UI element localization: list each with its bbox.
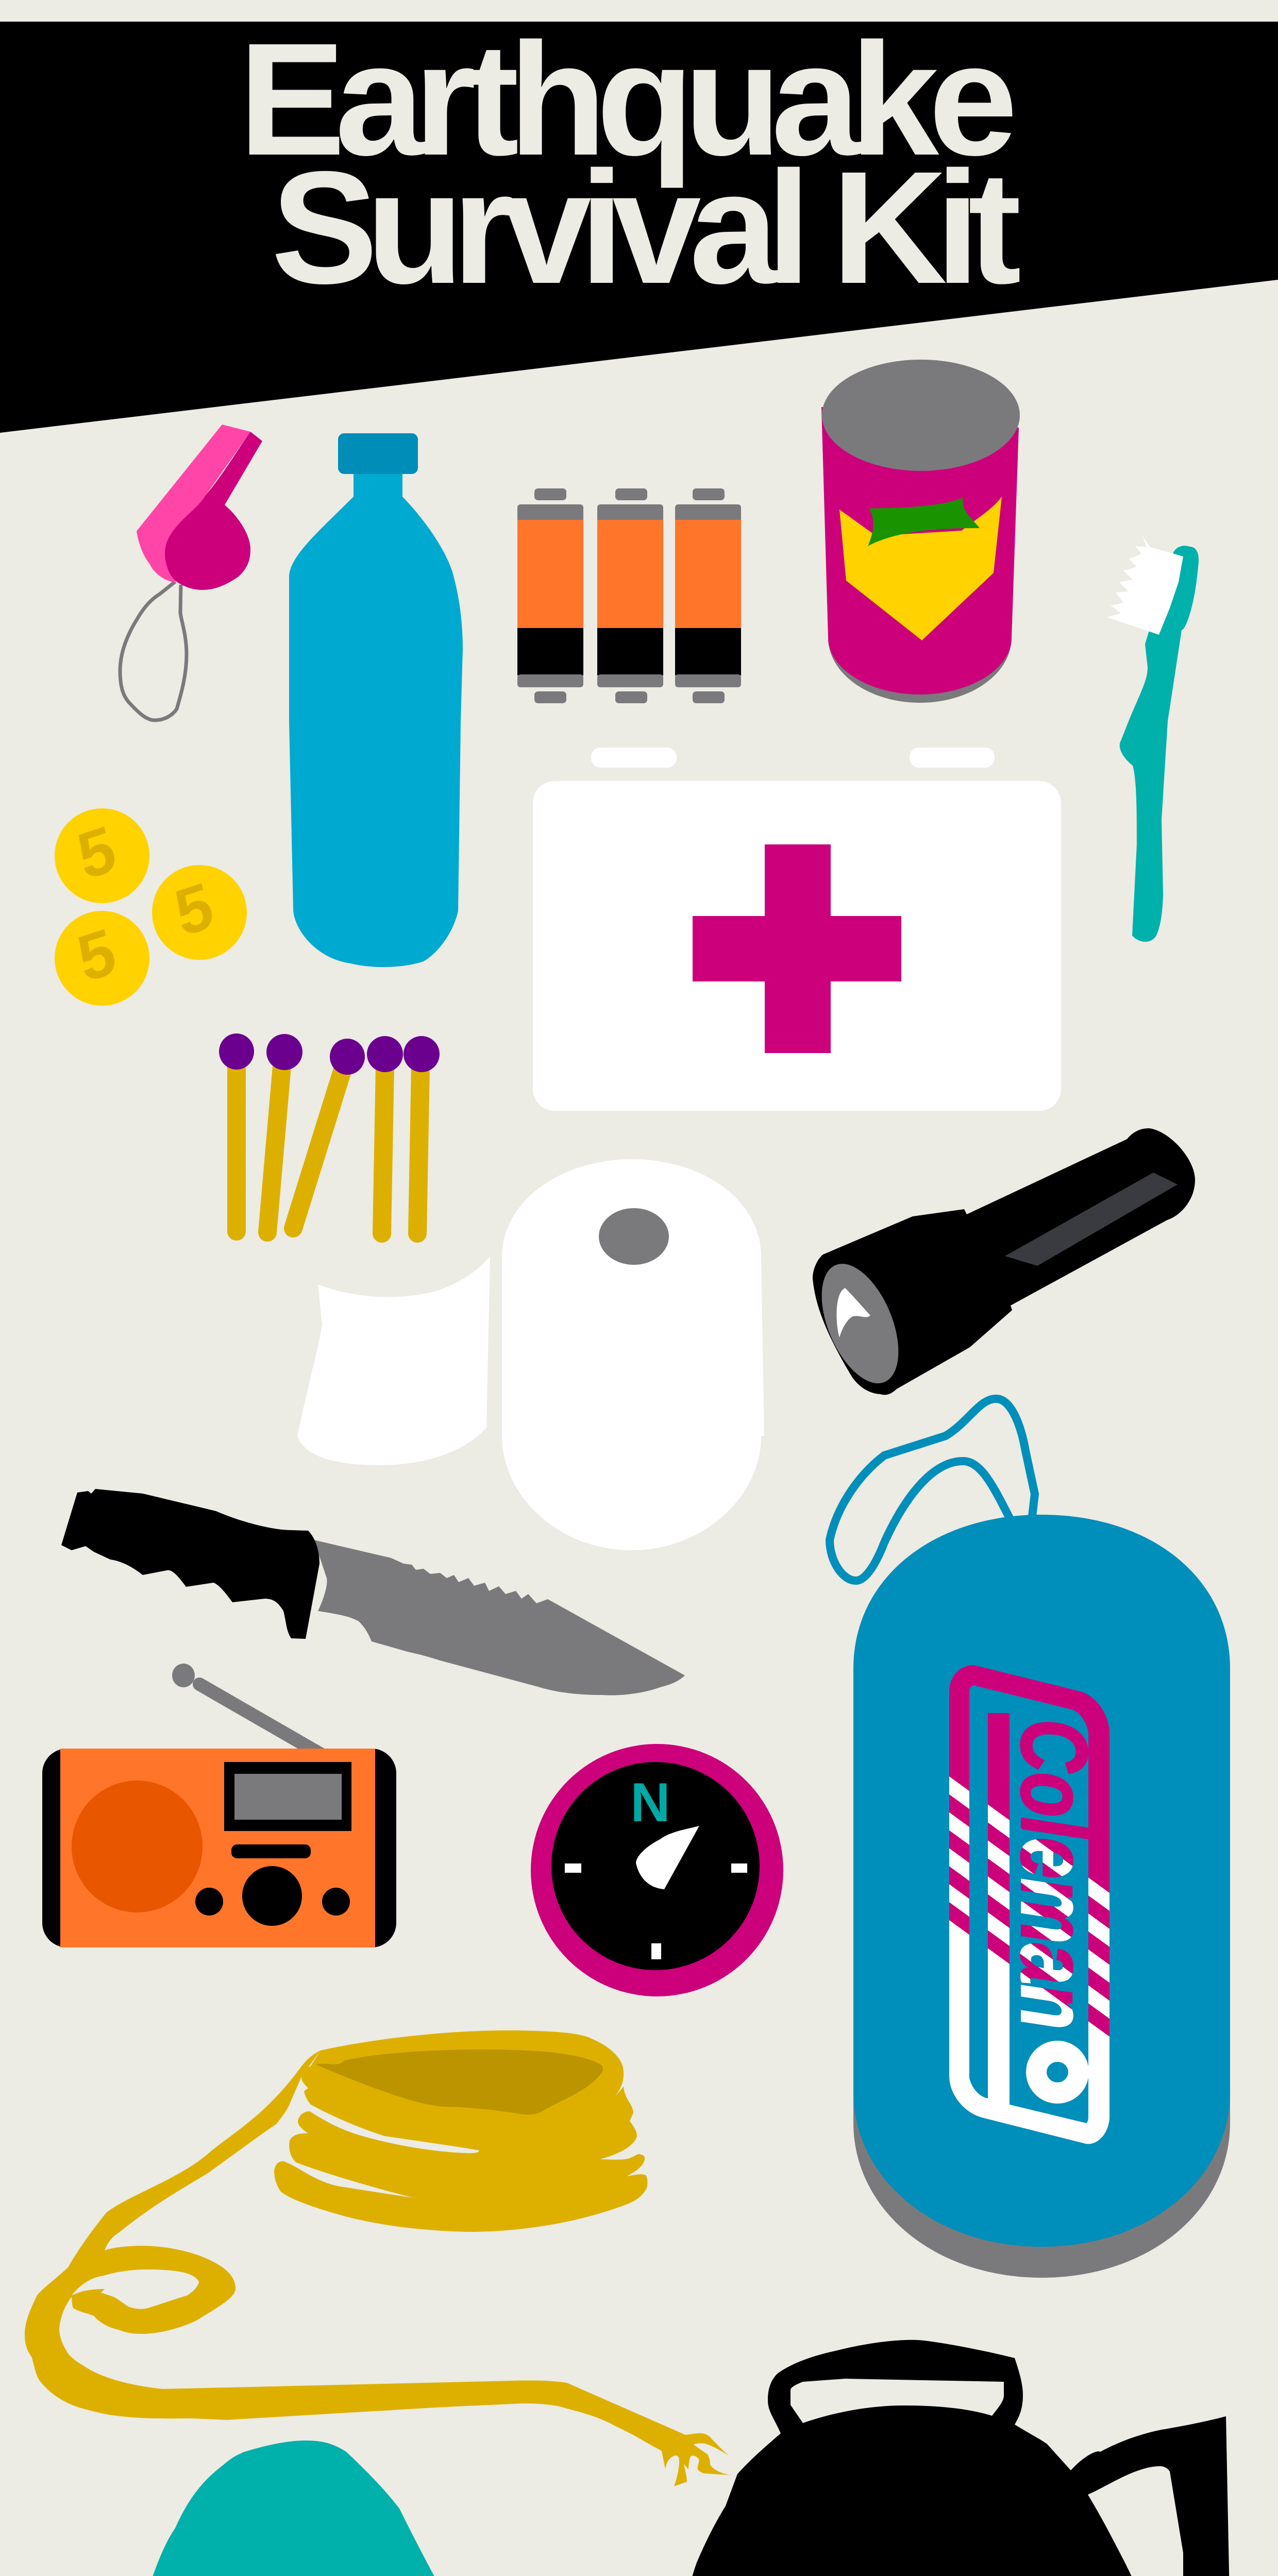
kit box (533, 781, 1061, 1111)
logo frame and bar (949, 1665, 1109, 2144)
match sticks (237, 1061, 421, 1233)
coin (152, 865, 247, 960)
flashlight body (813, 1128, 1195, 1395)
icon: toothbrush (1107, 536, 1199, 942)
display screen (234, 1774, 342, 1820)
can label leaf (868, 498, 980, 546)
title: Survival Kit (271, 138, 1021, 317)
logo ring (1026, 2041, 1089, 2104)
bag shadow (853, 1700, 1230, 2278)
knife handle (61, 1489, 320, 1639)
coin (55, 911, 149, 1006)
whistle dark side (165, 432, 262, 590)
can label (839, 497, 1002, 640)
logo wordmark: Coleman (1002, 1719, 1107, 2029)
left knob (195, 1888, 223, 1916)
logo (949, 1665, 1109, 2144)
paper sheet (297, 1256, 490, 1465)
knife blade (314, 1540, 685, 1695)
icon: first aid kit (533, 748, 1061, 1111)
icon: toilet paper (297, 1159, 764, 1550)
compass face (551, 1762, 760, 1970)
icon: raincoat (16, 2441, 611, 2576)
icon: sleeping bag (830, 1399, 1230, 2278)
match heads (219, 1033, 440, 1075)
rope coil shadow (315, 2049, 603, 2114)
can shadow (828, 637, 1012, 703)
toothbrush handle (1120, 546, 1199, 942)
coin: 5 (168, 868, 220, 950)
speaker (72, 1781, 203, 1912)
title: Earthquake (239, 9, 1018, 190)
toothbrush bristles (1107, 536, 1183, 635)
antenna (172, 1664, 358, 1771)
red cross (693, 844, 901, 1053)
coin: 5 (71, 811, 123, 893)
radio casing (42, 1749, 396, 1947)
can body (821, 407, 1019, 694)
icon: whistle (120, 425, 262, 720)
right knob (322, 1888, 350, 1916)
icon: knife (61, 1489, 685, 1695)
pack body (603, 2340, 1245, 2576)
display frame (224, 1762, 351, 1831)
main knob (242, 1866, 302, 1926)
flashlight lens (806, 1253, 914, 1394)
icon: backpack (603, 2340, 1245, 2576)
icon: compass (531, 1744, 783, 1996)
compass ticks (565, 1863, 747, 1959)
header band (0, 22, 1278, 433)
battery 1 (517, 488, 583, 703)
bag strap (830, 1399, 1035, 1581)
paper roll (502, 1159, 764, 1550)
whistle light side (137, 425, 250, 583)
roll core (599, 1208, 669, 1265)
flashlight grip (1005, 1173, 1178, 1266)
compass needle (636, 1826, 699, 1889)
radio face (60, 1749, 375, 1947)
slider (231, 1844, 311, 1858)
can lid (822, 360, 1020, 471)
bottle cap (338, 433, 418, 474)
title (239, 9, 1021, 317)
kit handle right (910, 748, 995, 768)
icon: radio (42, 1664, 396, 1947)
icon: batteries (517, 488, 741, 703)
north label: N (630, 1771, 670, 1833)
coin (55, 808, 149, 903)
bottle body (289, 474, 463, 967)
icon: matches (219, 1033, 440, 1233)
icon: food can (821, 360, 1020, 703)
rope coil (274, 2030, 647, 2232)
icon: rope (25, 2030, 730, 2486)
bag body (853, 1515, 1230, 2247)
rope tail (25, 2050, 730, 2486)
icon: coins (55, 808, 247, 1006)
kit handle left (591, 748, 677, 768)
coin: 5 (71, 914, 123, 996)
whistle cord (120, 582, 187, 720)
battery 2 (597, 488, 663, 703)
compass rim (531, 1744, 783, 1996)
battery 3 (675, 488, 741, 703)
icon: water bottle (289, 433, 463, 967)
coat (16, 2441, 611, 2576)
icon: flashlight (806, 1128, 1195, 1395)
lens glint (836, 1288, 870, 1337)
